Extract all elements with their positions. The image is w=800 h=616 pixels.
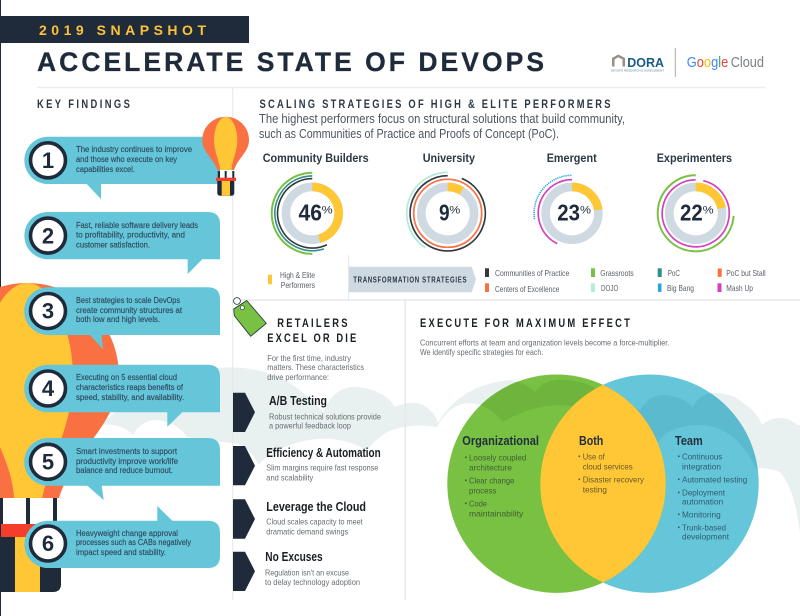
chart: university: University	[423, 151, 475, 165]
heading: retailers excel or die: EXCEL OR DIE	[267, 332, 356, 345]
venn: both: Both	[579, 433, 603, 448]
panel: key findings bubbles	[24, 137, 220, 568]
item: A/B testing: Robust technical solutions provide	[269, 412, 381, 422]
venn: both	[578, 433, 645, 494]
venn: organizational: Clear change	[469, 476, 515, 486]
finding 5: balance and reduce burnout.	[76, 466, 173, 475]
finding 5	[24, 438, 220, 500]
finding 3: Best strategies to scale DevOps	[76, 296, 180, 305]
finding 5: productivity improve work/life	[76, 457, 179, 466]
heading: scaling strategies: SCALING STRATEGIES OF HIGH & ELITE PERFORMERS	[260, 98, 610, 111]
retailers intro: drive performance:	[267, 373, 329, 382]
venn: organizational: architecture	[469, 462, 512, 472]
finding 4: Executing on 5 essential cloud	[76, 373, 177, 382]
finding 6: Heavyweight change approval	[76, 529, 178, 538]
item: no excuses: to delay technology adoption	[265, 578, 360, 587]
chart: community builders	[263, 151, 369, 260]
item: A/B testing: a powerful feedback loop	[269, 422, 351, 430]
venn: both: Disaster recovery	[583, 474, 645, 484]
chart: community builders: Community Builders	[263, 151, 369, 165]
legend: high and elite performers: High & Elite	[280, 270, 315, 280]
finding 6: impact speed and stability.	[76, 548, 166, 557]
finding 2: customer satisfaction.	[76, 240, 150, 250]
finding 3: create community structures at	[76, 306, 183, 315]
panel: scaling strategies	[259, 98, 766, 294]
finding 1: capabilities excel.	[76, 165, 135, 174]
legend: high and elite performers: Performers	[281, 280, 315, 290]
finding 2: Fast, reliable software delivery leads	[76, 221, 198, 230]
item: efficiency and automation: Slim margins require fast response	[266, 464, 379, 472]
finding 6: 6	[42, 531, 54, 556]
finding 4: characteristics reaps benefits of	[76, 383, 184, 392]
scaling strategies intro: such as Communities of Practice and Proofs of Concept (PoC).	[259, 127, 559, 141]
chart: experimenters: Experimenters	[657, 151, 732, 165]
venn: team: development	[682, 532, 730, 542]
finding 2: to profitability, productivity, and	[76, 230, 185, 240]
finding 3: 3	[42, 299, 54, 324]
chart: emergent	[527, 151, 617, 258]
item: no excuses: Regulation isn't an excuse	[265, 568, 349, 578]
item: leverage the cloud: Leverage the Cloud	[266, 500, 366, 514]
legend: transformation strategies: Communities of Practice	[495, 268, 570, 278]
finding 3	[24, 287, 220, 349]
venn: team: Continuous	[682, 452, 722, 462]
execute intro: Concurrent efforts at team and organization levels become a force-multiplier.	[420, 338, 669, 348]
icon: price tag	[234, 298, 266, 336]
venn: team: automation	[682, 497, 724, 507]
finding 5: Smart investments to support	[76, 447, 178, 456]
item: no excuses	[233, 550, 360, 591]
chart: community builders: %	[322, 204, 333, 216]
finding 1	[24, 137, 220, 199]
legend: transformation strategies: Grassroots	[600, 268, 634, 278]
item: efficiency and automation: and scalability	[266, 474, 314, 482]
venn: organizational: Code	[469, 498, 487, 508]
finding 3: both low and high levels.	[76, 315, 160, 324]
item: efficiency and automation	[233, 446, 381, 485]
venn: both: Use of	[583, 452, 605, 462]
icon: DORA house	[612, 54, 625, 66]
heading: retailers excel or die: RETAILERS	[277, 317, 347, 330]
retailers intro: For the first time, industry	[267, 354, 352, 363]
chart: university: %	[449, 204, 461, 216]
logos: Cloud	[731, 55, 764, 71]
finding 2	[24, 212, 220, 274]
venn: both: testing	[583, 484, 607, 494]
execute intro: We identify specific strategies for each.	[420, 348, 543, 357]
venn: organizational: Loosely coupled	[469, 452, 527, 462]
legend: transformation strategies	[485, 268, 766, 294]
logos: DEVOPS RESEARCH & ASSESSMENT	[611, 68, 664, 72]
execute intro	[420, 338, 669, 357]
venn: team: Automated testing	[682, 474, 748, 484]
venn: organizational	[462, 433, 539, 518]
header banner	[0, 16, 249, 43]
heading: key findings: KEY FINDINGS	[37, 98, 130, 111]
venn: team	[675, 433, 748, 542]
heading: retailers excel or die	[267, 317, 356, 345]
scaling strategies intro	[259, 112, 625, 141]
item: leverage the cloud: Cloud scales capacity to meet	[266, 518, 363, 526]
panel dividers	[37, 87, 800, 600]
legend: transformation strategies: Big Bang	[667, 283, 694, 293]
illustration: large hot air balloon	[0, 283, 119, 592]
venn: organizational: maintainability	[469, 508, 524, 518]
venn: team: Trunk-based	[682, 522, 726, 532]
illustration: small hot air balloon	[202, 117, 249, 196]
item: efficiency and automation: Efficiency & Automation	[266, 446, 381, 460]
chart: emergent: %	[580, 204, 591, 216]
chart: experimenters: %	[703, 204, 714, 216]
legend: transformation strategies: DOJO	[601, 283, 619, 293]
legend: transformation strategies: PoC but Stall	[726, 268, 766, 278]
item: leverage the cloud: dramatic demand swings	[266, 528, 348, 536]
finding 4	[24, 365, 220, 427]
venn diagram	[438, 374, 762, 593]
item: A/B testing: A/B Testing	[269, 394, 327, 408]
item: leverage the cloud	[233, 499, 366, 539]
venn: team: Deployment	[682, 488, 726, 498]
title: ACCELERATE STATE OF DEVOPS	[37, 47, 544, 77]
chart: university: 9	[439, 200, 450, 226]
background cloud band	[100, 367, 800, 533]
chart: university	[391, 151, 504, 270]
finding 5: 5	[42, 450, 54, 474]
finding 1: The industry continues to improve	[76, 145, 193, 154]
panel: execute for maximum effect	[420, 317, 762, 593]
arrow: transformation strategies: TRANSFORMATION STRATEGIES	[353, 275, 467, 285]
logos: Google	[687, 55, 728, 71]
finding 2: 2	[42, 223, 54, 248]
finding 6	[24, 506, 220, 568]
scaling strategies intro: The highest performers focus on structural solutions that build community,	[259, 112, 625, 126]
chart: emergent: 23	[557, 200, 580, 226]
finding 1: and those who execute on key	[76, 155, 177, 164]
legend: transformation strategies: Centers of Excellence	[495, 284, 560, 294]
chart: community builders: 46	[298, 200, 322, 226]
retailers intro: matters. These characteristics	[267, 363, 364, 372]
legend: transformation strategies: Mash Up	[726, 283, 753, 293]
finding 4: 4	[42, 376, 55, 401]
venn: both: cloud services	[583, 462, 633, 472]
logos	[611, 48, 764, 77]
venn: team: Team	[675, 433, 703, 448]
venn: team: integration	[682, 462, 721, 472]
finding 4: speed, stability, and availability.	[76, 393, 184, 402]
item: no excuses: No Excuses	[265, 550, 323, 564]
legend: high and elite performers	[268, 270, 315, 290]
chart: experimenters: 22	[680, 200, 703, 226]
arrow: transformation strategies	[349, 267, 476, 292]
chart: experimenters	[655, 151, 736, 254]
chart: emergent: Emergent	[547, 151, 597, 165]
panel: retailers	[233, 298, 381, 591]
retailers intro	[267, 354, 364, 382]
legend: transformation strategies: PoC	[668, 268, 680, 278]
heading: execute: EXECUTE FOR MAXIMUM EFFECT	[420, 317, 630, 330]
venn: team: Monitoring	[682, 510, 721, 520]
venn: organizational: Organizational	[462, 433, 539, 448]
finding 6: processes such as CABs negatively	[76, 538, 191, 547]
finding 1: 1	[42, 148, 54, 173]
item: A/B testing	[233, 393, 381, 432]
venn: organizational: process	[469, 486, 496, 496]
logos: DORA	[627, 55, 665, 70]
header banner: 2019 SNAPSHOT	[39, 22, 206, 38]
